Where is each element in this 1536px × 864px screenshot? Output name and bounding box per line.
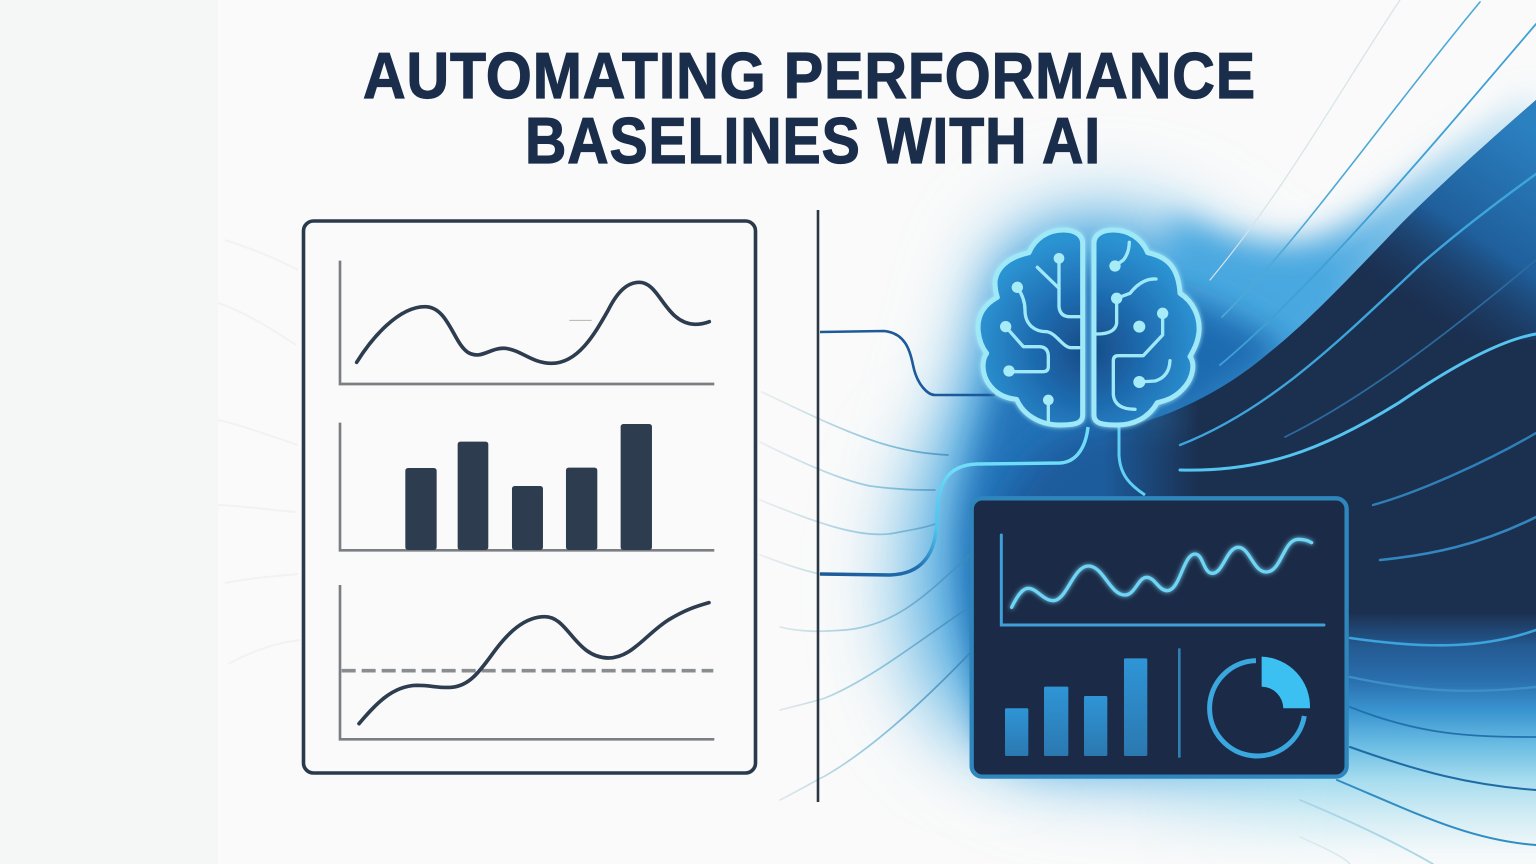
bar chart: middle [340,423,714,550]
dark swoosh [1114,100,1536,850]
title: AUTOMATING PERFORMANCE [363,39,1256,112]
title: BASELINES WITH AI [525,104,1101,177]
brain circuit nodes [1000,253,1168,405]
flow lines left of the dashboard [760,392,970,800]
panel: AI dashboard [972,498,1347,777]
divider line [817,210,819,802]
dashboard separator [1175,648,1183,758]
dashboard line chart [1001,535,1324,625]
panel: manual baseline charts [304,221,756,773]
brain circuit traces [1006,242,1170,422]
line chart: top [340,261,714,384]
line chart: bottom with dashed baseline [340,585,714,739]
blue glow behind brain and dashboard [894,205,1380,790]
deeper blue right of the brain [1150,290,1290,420]
connector: divider to brain [820,331,995,395]
dashboard donut chart [1210,657,1310,756]
brain outline [978,230,1199,425]
title [363,39,1256,177]
faint flow lines behind left panel [218,240,300,664]
connector: brain to dashboard [1119,425,1145,495]
connector: divider to brain via dashboard top [820,427,1088,575]
dashboard bar chart [1005,658,1147,756]
light blue band above the dark swoosh [1160,92,1536,430]
flow lines on the right [1180,0,1536,864]
icon: circuit brain [978,230,1199,425]
